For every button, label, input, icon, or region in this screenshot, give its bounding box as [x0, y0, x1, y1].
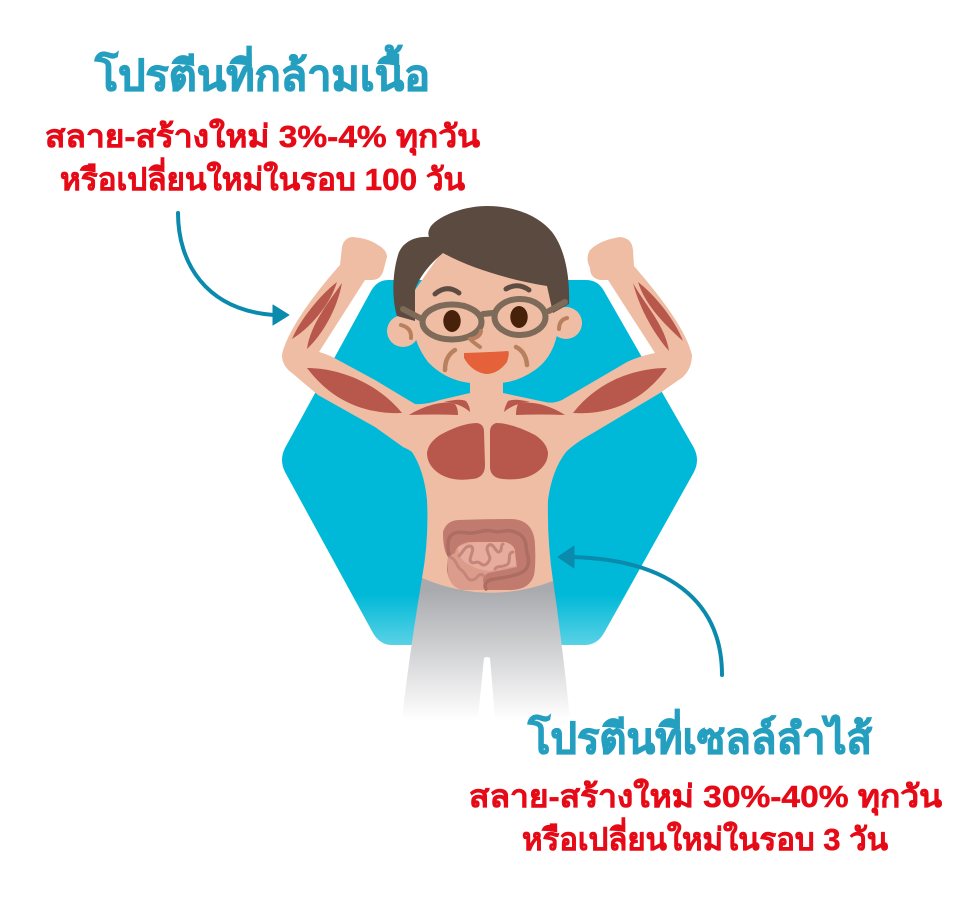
arrow to arm muscle: [178, 213, 289, 325]
shoulder muscles: [409, 400, 565, 415]
text: intestinal protein turnover: สลาย-สร้างใหม่ 30%-40% ทุกวัน: [469, 778, 942, 816]
trousers: [402, 578, 570, 718]
upper arm muscles: [307, 368, 667, 413]
mouth: [464, 351, 509, 374]
nose: [470, 331, 481, 347]
text: muscle protein turnover: หรือเปลี่ยนใหม่ในรอบ 100 วัน: [60, 157, 465, 197]
heading: muscle protein: โปรตีนที่กล้ามเนื้อ: [94, 44, 430, 99]
ears: [387, 315, 419, 347]
character illustration: [282, 206, 692, 718]
heading: intestinal cell protein: โปรตีนที่เซลล์ลำไส้: [527, 709, 872, 762]
text: intestinal protein turnover: [469, 778, 942, 857]
text: muscle protein turnover: [45, 118, 480, 197]
face: [413, 250, 557, 383]
intestines: [443, 519, 535, 590]
right forearm muscles: [633, 282, 683, 351]
eyes: [443, 310, 461, 332]
eyebrows: [435, 286, 529, 294]
chest muscles: [427, 423, 548, 480]
left forearm muscles: [292, 282, 342, 349]
hexagon background: [282, 280, 697, 645]
text: muscle protein turnover: สลาย-สร้างใหม่ 3%-4% ทุกวัน: [45, 118, 480, 156]
text: intestinal protein turnover: หรือเปลี่ยนใหม่ในรอบ 3 วัน: [522, 817, 888, 857]
arrow to intestine: [558, 546, 722, 675]
body and arms: [282, 237, 692, 593]
glasses: [403, 299, 565, 340]
head: [387, 206, 582, 383]
smile lines: [445, 347, 527, 370]
hair: [393, 206, 569, 321]
